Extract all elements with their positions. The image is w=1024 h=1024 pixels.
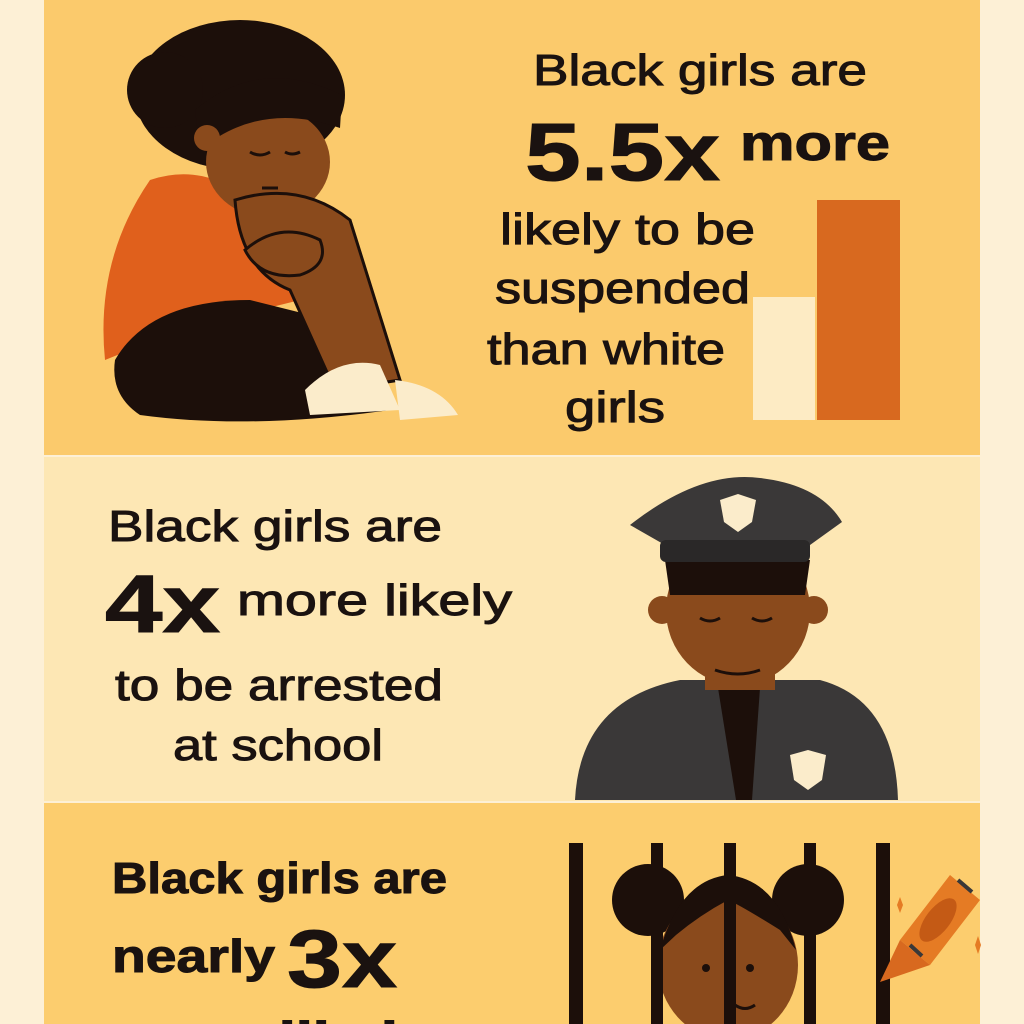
- stat: 5.5x more: [525, 107, 890, 198]
- stat: nearly 3x: nearly: [112, 930, 275, 982]
- stat: 4x more likely: more likely: [237, 576, 512, 625]
- text block: to be arrested at school: at school: [173, 721, 383, 770]
- stat: nearly 3x: [112, 914, 397, 1005]
- stat: 5.5x more: 5.5x: [525, 107, 720, 198]
- icon: crayon: [880, 875, 981, 982]
- stat: 5.5x more: more: [740, 115, 890, 171]
- illustration: police officer: [575, 477, 898, 800]
- panel: juvenile justice: [44, 803, 981, 1024]
- stat: 4x more likely: [105, 559, 512, 650]
- text block: to be arrested at school: [115, 661, 443, 770]
- heading: Black girls are: Black girls are: [108, 502, 442, 551]
- text block: likely to be suspended than white girls: girls: [565, 383, 665, 432]
- text block: likely to be suspended than white girls: suspended: [495, 264, 750, 313]
- heading: Black girls are: Black girls are: [533, 46, 867, 95]
- text block: likely to be suspended than white girls: than white: [487, 325, 725, 374]
- text block: likely to be suspended than white girls: likely to be: [500, 205, 755, 254]
- stat: nearly 3x: 3x: [287, 914, 397, 1005]
- text block: likely to be suspended than white girls: [487, 205, 755, 432]
- illustration: girl behind bars: [569, 843, 890, 1024]
- heading: Black girls are: Black girls are: [112, 854, 447, 903]
- panel: arrests: [44, 457, 980, 801]
- bar chart: white vs black girls: [753, 200, 900, 420]
- panel: suspension: [44, 0, 980, 455]
- stat: 4x more likely: 4x: [105, 559, 220, 650]
- text block: to be arrested at school: to be arrested: [115, 661, 443, 710]
- illustration: girl hugging knees: [103, 20, 458, 421]
